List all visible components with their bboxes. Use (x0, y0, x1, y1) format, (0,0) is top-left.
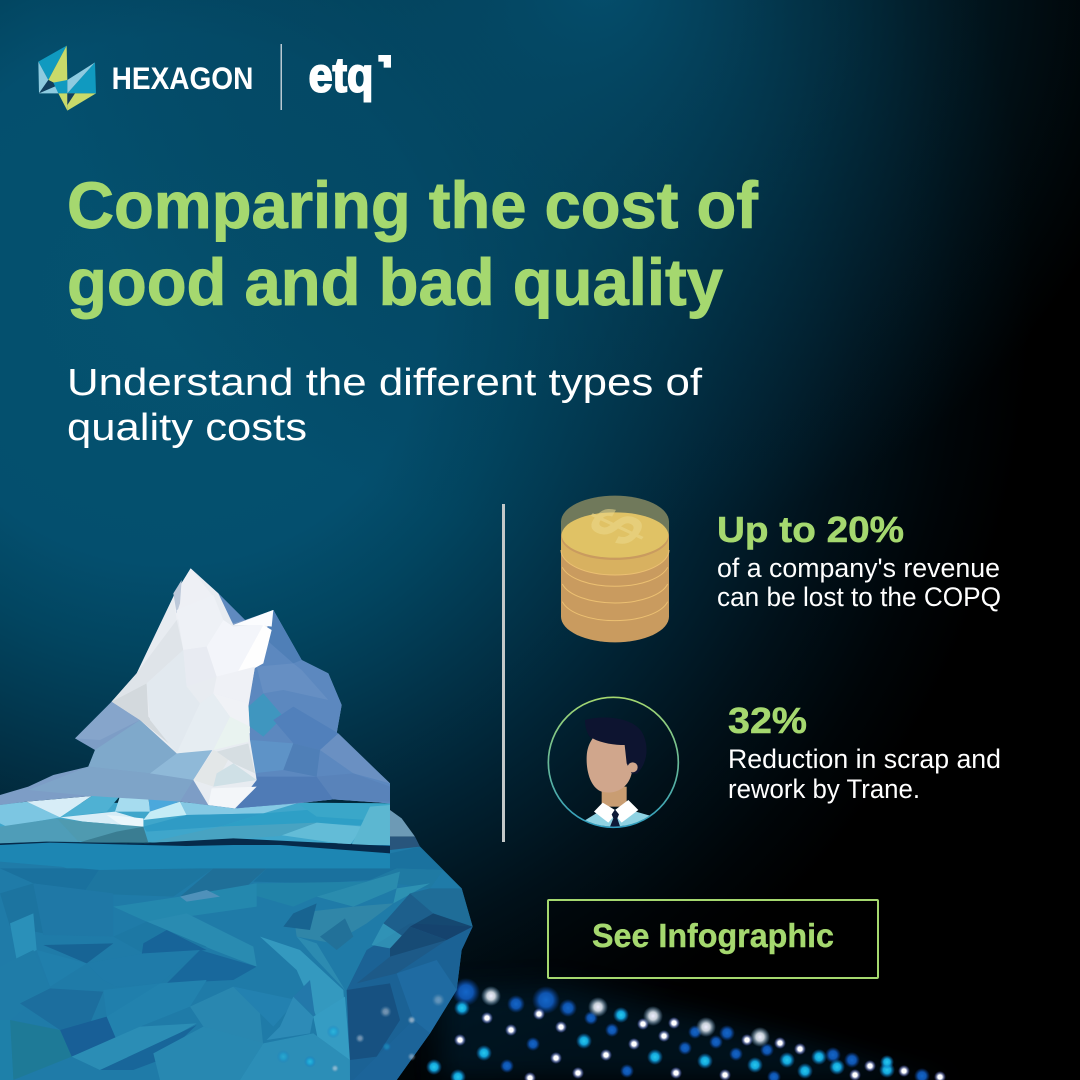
iceberg: light dots seen through the ice (277, 993, 445, 1072)
stat description: revenue: can be lost to the COPQ (717, 582, 1001, 612)
icon: etq corner bracket (378, 55, 391, 68)
dot field: glowing lights (426, 978, 960, 1080)
icon: stack of gold coins (561, 496, 669, 642)
title: good and bad quality (67, 245, 723, 319)
wordmark: etq: etq (309, 49, 373, 103)
subtitle: quality costs (67, 407, 307, 449)
iceberg: underwater body (0, 838, 473, 1080)
iceberg: waterline band (0, 796, 420, 853)
title: Comparing the cost of (67, 168, 759, 242)
icon: Hexagon mark (38, 46, 96, 111)
icon: person portrait in ring (548, 697, 678, 830)
subtitle (67, 362, 702, 449)
wordmark: HEXAGON: HEXAGON (112, 61, 253, 96)
icon: dollar sign: $ (570, 497, 662, 555)
stat value: 32%: 32% (728, 700, 807, 741)
stat 1: revenue lost (561, 496, 1001, 642)
stat description: revenue (717, 553, 1001, 612)
stat description: revenue: of a company's revenue (717, 553, 1000, 583)
button: See Infographic: See Infographic (592, 917, 834, 954)
subtitle: Understand the different types of (67, 362, 702, 404)
stat 2: scrap and rework reduction (548, 697, 1001, 830)
stat description: Trane: Reduction in scrap and (728, 744, 1001, 774)
title (67, 168, 759, 319)
stat value: up to 20%: Up to 20% (717, 509, 904, 550)
button: See Infographic (548, 900, 878, 978)
iceberg illustration (0, 568, 473, 1080)
divider between iceberg and stats (502, 504, 505, 842)
stat description: Trane (728, 744, 1001, 804)
iceberg: above-water tip (0, 568, 390, 808)
stat description: Trane: rework by Trane. (728, 774, 920, 804)
logo: Hexagon and ETQ (38, 46, 391, 111)
